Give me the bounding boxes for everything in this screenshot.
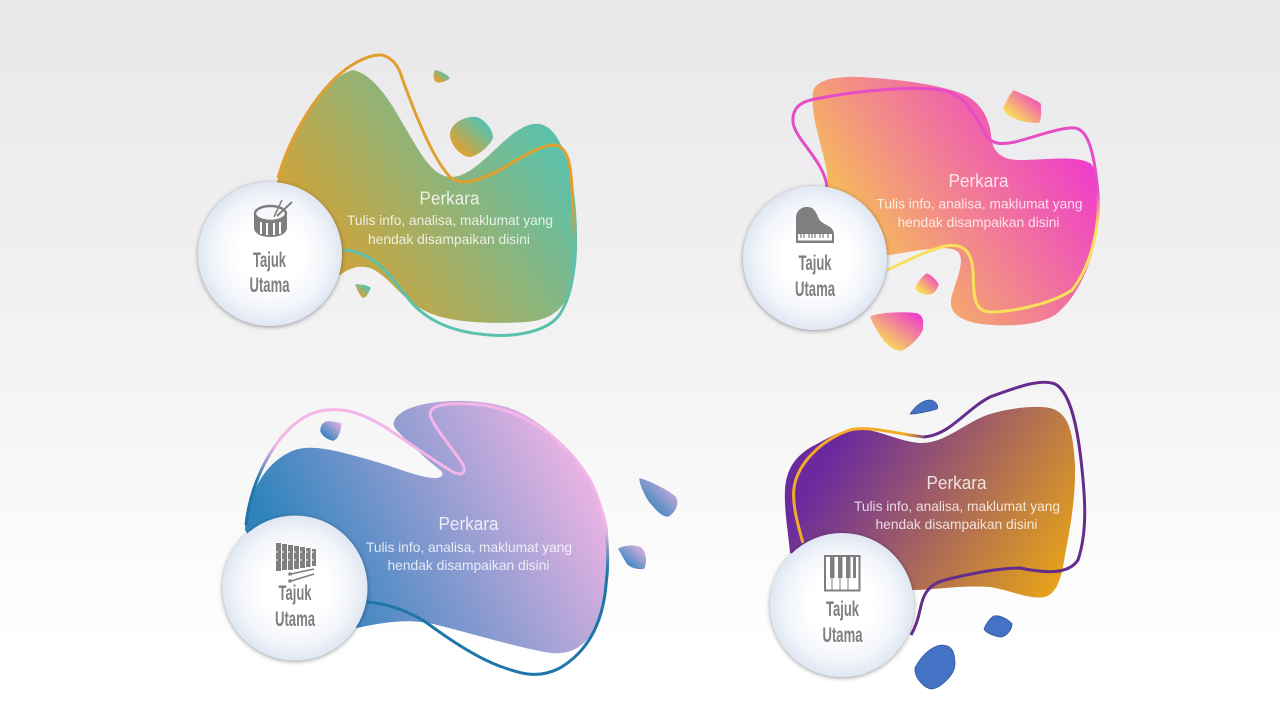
panel: bottom-left blue and pink blob <box>245 401 677 674</box>
small shape: top <box>910 400 938 414</box>
title: Tajuk <box>253 249 286 272</box>
small shape: top <box>321 422 341 440</box>
small shape: middle <box>450 117 493 157</box>
description: Tulis info, analisa, maklumat yang <box>854 498 1060 514</box>
panel: top-right pink and orange blob <box>793 77 1098 350</box>
badge: grand piano <box>743 186 887 330</box>
icon: xylophone <box>276 543 316 583</box>
outline stroke <box>278 55 574 335</box>
description: hendak disampaikan disini <box>368 231 530 247</box>
panel: top-left green and orange blob <box>277 55 577 335</box>
badge: xylophone <box>222 516 368 660</box>
badge: drum <box>198 182 342 326</box>
description: hendak disampaikan disini <box>876 516 1038 532</box>
small shape: top <box>434 71 449 82</box>
description <box>347 212 553 247</box>
panel: bottom-right purple and orange blob <box>785 382 1085 689</box>
description: hendak disampaikan disini <box>898 214 1060 230</box>
small shape: bottom <box>915 645 955 689</box>
description: Tulis info, analisa, maklumat yang <box>876 196 1082 212</box>
title <box>250 249 290 297</box>
icon: piano keys <box>825 556 860 590</box>
outline stroke: orange section <box>794 429 925 543</box>
blob shape <box>785 407 1075 598</box>
small shape: top <box>1004 91 1040 122</box>
description: Tulis info, analisa, maklumat yang <box>366 539 572 555</box>
small shape: right lower <box>619 546 645 568</box>
badge: piano keys <box>770 533 914 677</box>
title <box>822 598 863 647</box>
small shape: middle <box>916 274 938 294</box>
heading: Perkara <box>420 188 480 208</box>
blob shape <box>245 401 608 653</box>
heading: Perkara <box>438 514 499 534</box>
heading: Perkara <box>948 171 1009 191</box>
description <box>854 498 1060 532</box>
title <box>795 252 835 301</box>
description: hendak disampaikan disini <box>388 557 550 573</box>
description: Tulis info, analisa, maklumat yang <box>347 212 553 228</box>
title: Utama <box>250 274 290 297</box>
outline stroke: purple section <box>911 382 1085 635</box>
title: Utama <box>795 278 835 301</box>
title: Utama <box>822 624 863 647</box>
icon: drum <box>254 200 292 237</box>
title: Tajuk <box>826 598 859 621</box>
blob shape <box>813 77 1098 325</box>
small shape: bottom <box>871 313 922 350</box>
small shape: lower <box>356 285 370 297</box>
title <box>275 582 315 631</box>
outline stroke <box>246 404 608 674</box>
title: Tajuk <box>278 582 312 605</box>
description <box>876 196 1082 230</box>
description <box>366 539 572 573</box>
small shape: right upper <box>640 479 677 516</box>
heading: Perkara <box>926 473 987 493</box>
blob shape <box>277 70 577 323</box>
title: Utama <box>275 608 315 631</box>
title: Tajuk <box>798 252 832 275</box>
icon: grand piano <box>796 207 834 243</box>
outline stroke <box>793 88 1098 312</box>
small shape: right <box>984 616 1012 637</box>
